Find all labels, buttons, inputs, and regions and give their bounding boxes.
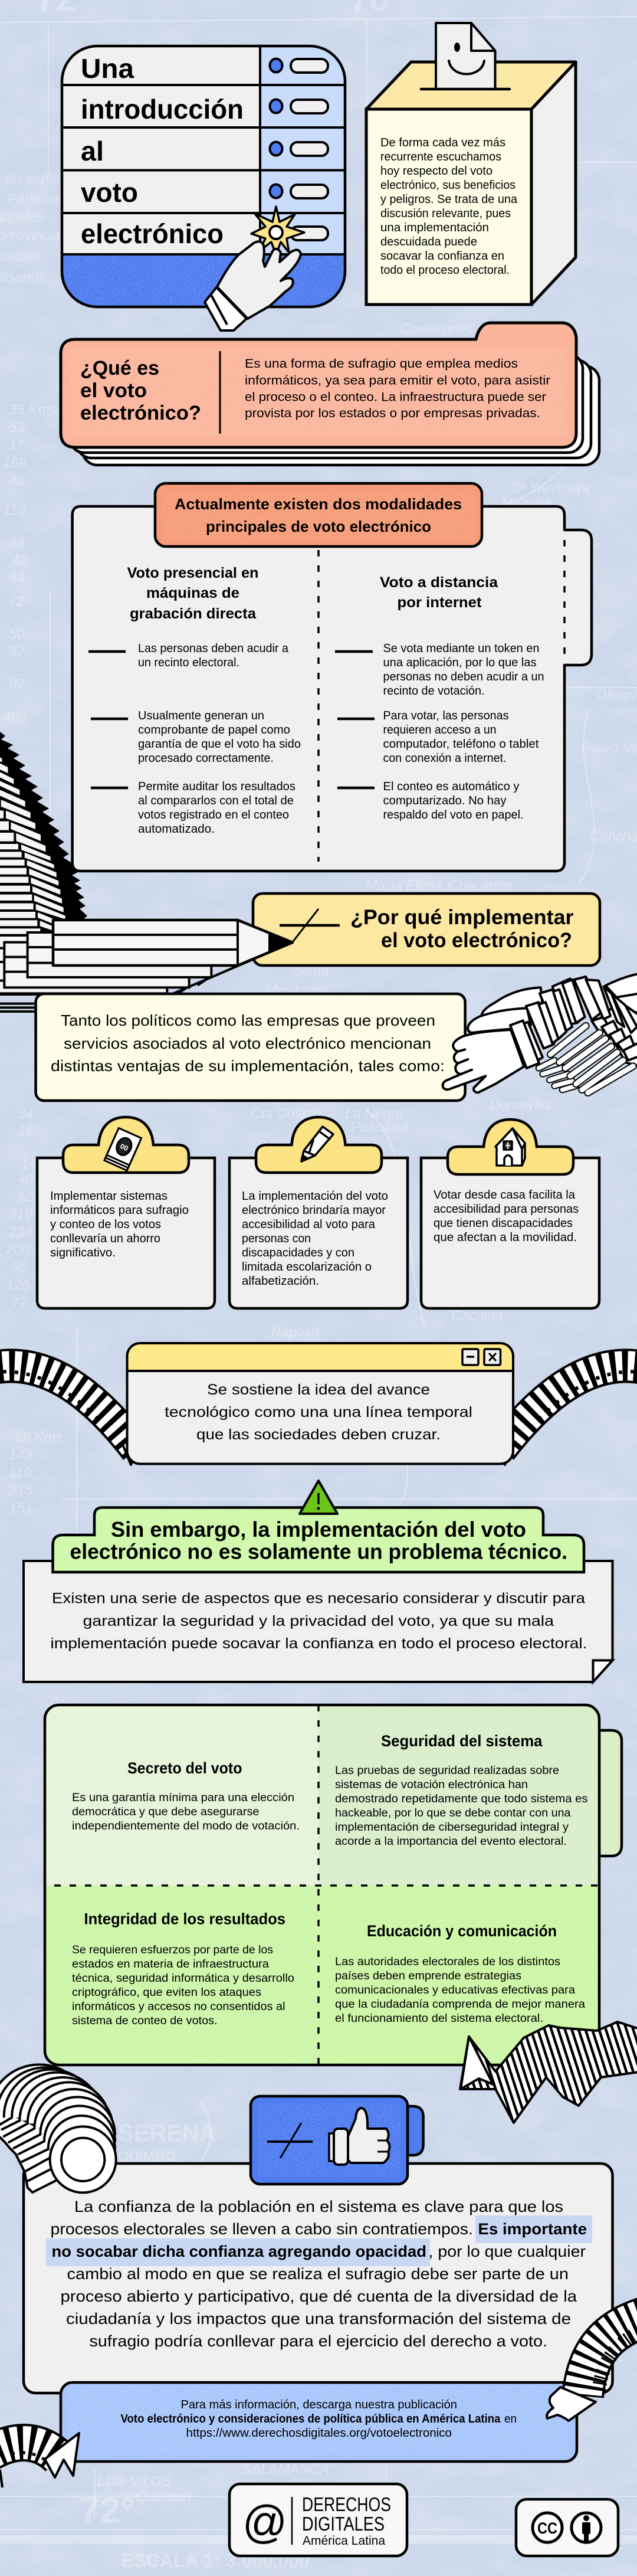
illustration: rope with hand, lower right	[547, 2316, 637, 2421]
background map texture: Cº Yarvicaya	[510, 480, 590, 496]
panel: four aspects	[41, 1700, 622, 2068]
column: voto presencial: comprobante de papel como	[138, 724, 290, 737]
background map texture: 53	[9, 420, 25, 436]
column: voto presencial: garantía de que el voto ha sido	[138, 738, 301, 751]
panel: more information: Voto electrónico y consideraciones de política pública en América Latina	[120, 2413, 501, 2426]
stripes	[0, 757, 65, 934]
heading: electrónico?	[80, 402, 201, 424]
logo: Derechos Digitales	[229, 2484, 407, 2556]
heading: ¿Por qué implementar?: ¿Por qué implementar	[350, 906, 574, 929]
card: accesibilidad: personas con	[242, 1232, 311, 1245]
card: ahorro: significativo.	[50, 1246, 116, 1259]
icon: banknotes	[104, 1128, 142, 1170]
card: accesibilidad: accesibilidad al voto para	[242, 1218, 376, 1231]
card: accesibilidad: discapacidades y con	[242, 1246, 354, 1259]
icon: thumbs up badge	[251, 2096, 423, 2184]
heading: problema técnico: Sin embargo, la implementación del voto	[111, 1517, 526, 1541]
confianza text: no socabar dicha confianza agregando opacidad	[52, 2243, 426, 2260]
background map texture: Camarones	[400, 321, 473, 337]
confianza text: sufragio podría conllevar para el ejercicio del derecho a voto.	[90, 2332, 547, 2350]
icon: house	[495, 1128, 525, 1166]
panel: ¿Qué es el voto electrónico?	[61, 323, 599, 465]
card: accesibilidad	[229, 1117, 408, 1308]
column: voto a distancia: requieren acceso a un	[383, 724, 497, 737]
icon: hand pressing button	[205, 241, 301, 330]
background map texture: Mamiña	[501, 495, 551, 511]
title text: introducción	[81, 94, 244, 125]
confianza text: , por lo que cualquier	[428, 2243, 586, 2260]
background map texture: 84	[9, 570, 25, 586]
confianza text: ciudadanía y los impactos que una transformación del sistema de	[66, 2310, 571, 2328]
background map texture: Bahía	[292, 963, 329, 978]
header: modalities: principales de voto electrónico	[206, 518, 431, 535]
confianza text: Es importante	[478, 2220, 587, 2238]
cell: integridad de los resultados: criptográfico, que eviten los ataques	[72, 1986, 261, 1999]
background map texture: QUIMBO	[118, 2149, 176, 2165]
background map texture: 52	[18, 1189, 34, 1204]
background map texture: 233	[8, 1224, 33, 1240]
column: voto presencial: grabación directa	[130, 605, 257, 622]
column: voto a distancia: una aplicación, por lo que las	[383, 656, 537, 669]
column: voto a distancia: recinto de votación.	[383, 685, 485, 698]
ballot box text: una implementación	[380, 221, 489, 234]
illustration: coil top-left	[0, 2064, 116, 2192]
heading: problema técnico: electrónico no es solamente un problema técnico.	[70, 1539, 567, 1564]
background map texture: 319	[9, 1206, 32, 1222]
text: aspectos: garantizar la seguridad y la privacidad del voto, ya que su mala	[83, 1613, 554, 1629]
panel: two modalities	[73, 483, 592, 871]
background map texture: 77	[12, 1295, 28, 1311]
column: voto a distancia: computarizado. No hay	[383, 794, 506, 807]
heading: ¿Qué es	[80, 357, 159, 379]
card: ahorro: informáticos para sufragio	[50, 1204, 189, 1217]
ballot box text: recurrente escuchamos	[380, 150, 501, 163]
column: voto a distancia: Para votar, las personas	[383, 709, 508, 722]
background map texture: 200	[5, 1242, 30, 1258]
background map texture: 1: 3.000.000	[203, 2550, 310, 2571]
confianza text: proceso abierto y participativo, que dé cuenta de la diversidad de la	[60, 2287, 577, 2305]
column: voto presencial: Voto presencial en	[127, 565, 258, 581]
heading	[80, 357, 201, 424]
background map texture: 113	[3, 502, 26, 518]
column: voto a distancia: con conexión a internet.	[383, 752, 506, 765]
background map texture: Quilimari	[136, 2489, 192, 2505]
icon: banknotes: 00	[119, 1142, 130, 1153]
logo: Derechos Digitales: @	[242, 2496, 287, 2548]
cell: secreto del voto: Es una garantía mínima para una elección	[72, 1792, 294, 1804]
ballot box text: todo el proceso electoral.	[380, 264, 510, 277]
logo: Creative Commons BY: CC	[537, 2519, 557, 2537]
column: voto presencial: Usualmente generan un	[138, 709, 264, 722]
column: voto presencial: Permite auditar los resultados	[138, 780, 295, 793]
column: voto presencial: máquinas de	[146, 585, 239, 601]
background map texture: 34	[18, 1106, 34, 1122]
background map texture: 151	[9, 1500, 32, 1516]
illustration: arrow ribbon under aspects	[460, 2022, 637, 2123]
column: voto presencial: procesado correctamente.	[138, 752, 274, 765]
indicators: lights and switches	[270, 59, 328, 240]
background map texture: 50	[9, 626, 25, 642]
column: voto presencial: Las personas deben acudir a	[138, 642, 289, 655]
ballot box text: De forma cada vez más	[380, 136, 505, 149]
column: voto a distancia: por internet	[398, 594, 482, 611]
icon: spark	[251, 207, 304, 255]
background map texture: 72	[9, 594, 25, 610]
cell: seguridad del sistema: acorde a la importancia del evento electoral.	[335, 1835, 567, 1848]
column: voto presencial: un recinto electoral.	[138, 656, 239, 669]
background map texture: 40	[9, 473, 25, 489]
text: aspectos	[51, 1590, 587, 1652]
background map texture: 35 Kms.	[9, 402, 61, 418]
background map texture: Paposo	[271, 1324, 319, 1340]
definition text	[245, 357, 550, 420]
background map texture: Particula	[7, 191, 62, 207]
cell: secreto del voto: independientemente del modo de votación.	[72, 1820, 300, 1832]
definition text: el proceso o el conteo. La infraestructura puede ser	[245, 391, 546, 404]
card: accesibilidad: alfabetización.	[242, 1275, 319, 1288]
title text: al	[81, 136, 104, 166]
column: voto presencial: votos registrado en el conteo	[138, 809, 289, 821]
background map texture: 72°	[80, 2490, 135, 2531]
panel: ventajas intro: servicios asociados al voto electrónico mencionan	[64, 1035, 431, 1052]
background map texture: Cachina	[451, 1308, 503, 1324]
card: accesibilidad: limitada escolarización o	[242, 1261, 372, 1274]
background map texture: 460	[3, 709, 27, 725]
heading: el voto	[80, 379, 147, 402]
illustration: left arrow ribbon	[0, 1366, 150, 1465]
logo: Creative Commons BY	[516, 2499, 618, 2556]
cell: secreto del voto	[72, 1759, 300, 1832]
ballot box text: discusión relevante, pues	[380, 207, 511, 220]
column: voto a distancia: Voto a distancia	[380, 574, 498, 591]
heading: ¿Por qué implementar?: el voto electrónico?	[381, 929, 572, 952]
cell: educación y comunicación: el funcionamiento del sistema electoral.	[335, 2012, 543, 2025]
ballot box text: descuidada puede	[380, 235, 477, 248]
cell: secreto del voto: democrática y que debe asegurarse	[72, 1806, 260, 1818]
card: voto desde casa: accesibilidad para personas	[434, 1203, 579, 1216]
panel: ventajas intro: Tanto los políticos como las empresas que proveen	[61, 1012, 435, 1029]
definition text: Es una forma de sufragio que emplea medios	[245, 357, 518, 371]
icon: warning triangle	[300, 1481, 337, 1514]
background map texture: en explot	[6, 171, 64, 186]
cell: integridad de los resultados: Integridad de los resultados	[84, 1910, 285, 1927]
cell: educación y comunicación: Educación y comunicación	[367, 1922, 557, 1940]
icon: pencil	[301, 1127, 333, 1161]
definition text: informáticos, ya sea para emitir el voto, para asistir	[245, 374, 550, 387]
cell: seguridad del sistema: implementación de ciberseguridad integral y	[335, 1821, 569, 1834]
column: voto a distancia: computador, teléfono o tablet	[383, 738, 539, 751]
illustration: large pencil	[53, 920, 293, 965]
column: voto presencial	[88, 565, 301, 836]
card: ahorro: Implementar sistemas	[50, 1190, 168, 1203]
background map texture: 39	[9, 535, 25, 551]
cell: integridad de los resultados: técnica, seguridad informática y desarrollo	[72, 1972, 294, 1985]
background map texture: Chacance	[448, 878, 512, 893]
logo: Derechos Digitales: América Latina	[303, 2534, 385, 2548]
background map texture: 67	[9, 676, 25, 692]
column: voto a distancia	[335, 574, 544, 821]
cell: integridad de los resultados: informáticos y accesos no consentidos al	[72, 2001, 285, 2013]
cell: secreto del voto: Secreto del voto	[127, 1759, 242, 1777]
cell: integridad de los resultados: sistema de conteo de votos.	[72, 2015, 217, 2027]
panel: more information: Para más información, descarga nuestra publicación	[180, 2398, 457, 2411]
background map texture: 40	[18, 1171, 34, 1187]
background map texture: Domeyko	[490, 1097, 549, 1113]
background map texture: cipales	[0, 209, 44, 225]
cell: educación y comunicación: países deben emprende estrategias	[335, 1970, 521, 1982]
background map texture: ueblos	[0, 248, 42, 264]
text: aspectos: Existen una serie de aspectos que es necesario considerar y discutir para	[52, 1590, 585, 1606]
title text: electrónico	[81, 218, 224, 249]
panel: window dialog: Se sostiene la idea del avance	[207, 1382, 430, 1398]
illustration: right arrow ribbon	[484, 1366, 637, 1465]
illustration: arrow ribbon lower left	[0, 2433, 79, 2487]
background map texture: 110	[9, 1465, 32, 1481]
column: voto presencial: al compararlos con el total de	[138, 794, 294, 807]
cell: educación y comunicación: comunicacionales y educativas efectivas para	[335, 1984, 575, 1996]
background map texture: 14	[21, 1156, 37, 1172]
background map texture: 169	[3, 455, 27, 471]
highlight	[46, 2215, 592, 2266]
panel: ballot box	[366, 23, 576, 305]
cell: seguridad del sistema: demostrado repetidamente que todo sistema es	[335, 1793, 587, 1805]
text: aspectos: implementación puede socavar la confianza en todo el proceso electoral.	[51, 1635, 587, 1652]
column: voto a distancia: Se vota mediante un token en	[383, 642, 539, 655]
panel: more information	[61, 2382, 577, 2462]
background map texture: Provincia	[2, 228, 61, 244]
cell: educación y comunicación: Las autoridades electorales de los distintos	[335, 1956, 560, 1968]
cell: educación y comunicación: que la ciudadanía comprenda de mejor manera	[335, 1998, 585, 2011]
background map texture: ESCALA	[121, 2550, 199, 2571]
background map texture: María Elena	[366, 878, 442, 893]
card: voto desde casa: que afectan a la movilidad.	[434, 1231, 577, 1244]
ballot box text: hoy respecto del voto	[380, 165, 492, 178]
background map texture: 42	[12, 552, 28, 568]
card: voto desde casa: que tienen discapacidades	[434, 1217, 573, 1230]
title text: voto	[81, 177, 138, 208]
background map texture: Cta Colaso	[251, 1106, 321, 1122]
header: modalities: Actualmente existen dos modalidades	[175, 495, 462, 513]
cell: integridad de los resultados: Se requieren esfuerzos por parte de los	[72, 1944, 273, 1956]
panel: window dialog: que las sociedades deben cruzar.	[196, 1426, 441, 1443]
logo: Derechos Digitales: DERECHOS	[302, 2493, 391, 2515]
window buttons	[462, 1349, 500, 1365]
background map texture: 17	[9, 437, 25, 453]
background map texture: SALAMANCA	[242, 2462, 329, 2477]
icon: smiling ballot	[421, 23, 510, 89]
panel: title	[59, 41, 349, 330]
stacked pencils	[0, 932, 211, 1012]
illustration: pile of pencils	[0, 732, 293, 1012]
logo: Derechos Digitales: DIGITALES	[302, 2513, 385, 2535]
panel: ventajas intro	[36, 994, 465, 1101]
ballot box text: y peligros. Se trata de una	[380, 193, 518, 206]
heading: problema técnico	[53, 1507, 584, 1572]
cell: integridad de los resultados: estados en materia de infraestructura	[72, 1958, 269, 1971]
column: voto a distancia: El conteo es automático y	[383, 780, 519, 793]
background map texture: 215	[8, 1482, 33, 1498]
panel: confianza	[24, 2163, 612, 2393]
cell: seguridad del sistema: Seguridad del sistema	[381, 1732, 543, 1750]
icon: not-equal mark	[280, 909, 340, 941]
panel: more information: https://www.derechosdigitales.org/votoelectronico	[186, 2427, 452, 2440]
card: voto desde casa	[421, 1120, 599, 1308]
background map texture: 16	[18, 1124, 34, 1140]
background map texture: 66 Kms	[15, 1429, 63, 1445]
panel: window dialog: tecnológico como una una línea temporal	[165, 1404, 472, 1420]
definition text: provista por los estados o por empresas privadas.	[245, 407, 540, 420]
heading: ¿Por qué implementar?	[253, 893, 600, 965]
background map texture: Mejillones	[265, 982, 329, 998]
card: accesibilidad: La implementación del voto	[242, 1190, 388, 1203]
background map texture: 143	[9, 1447, 33, 1463]
confianza text: cambio al modo en que se realiza el sufragio debe ser parte de un	[67, 2265, 569, 2283]
panel: sin embargo	[24, 1481, 612, 1682]
panel: ventajas intro: distintas ventajas de su implementación, tales como:	[51, 1057, 445, 1075]
card: ahorro: conllevaría un ahorro	[50, 1232, 160, 1245]
cell: integridad de los resultados	[72, 1910, 294, 2027]
card: ahorro: y conteo de los votos	[50, 1218, 161, 1231]
card: ahorro	[37, 1117, 215, 1308]
cell: seguridad del sistema: Las pruebas de seguridad realizadas sobre	[335, 1765, 559, 1777]
background map texture: LOS VILOS	[97, 2473, 171, 2489]
card: voto desde casa: Votar desde casa facilita la	[434, 1189, 576, 1202]
cell: educación y comunicación	[335, 1922, 585, 2025]
background map texture: 96	[12, 1259, 28, 1275]
panel: window dialog	[127, 1343, 513, 1464]
title text	[81, 53, 244, 249]
confianza text: procesos electorales se lleven a cabo sin contratiempos.	[51, 2220, 473, 2238]
background map texture: La Negra	[345, 1106, 403, 1122]
cell: seguridad del sistema: hackeable, por lo que se debe contar con una	[335, 1807, 571, 1819]
background map texture: 126	[6, 1277, 30, 1293]
column: voto a distancia: personas no deben acudir a un	[383, 670, 544, 683]
background map texture: Palestina	[351, 1119, 409, 1135]
illustration: pointing hands with sleeves	[443, 974, 637, 1093]
background map texture: SERENA	[118, 2120, 216, 2146]
cell: seguridad del sistema: sistemas de votación electrónica han	[335, 1779, 528, 1791]
cell: seguridad del sistema	[335, 1732, 587, 1848]
header: modalities	[155, 483, 482, 546]
panel: more information: en	[504, 2413, 517, 2426]
background map texture: 37	[9, 644, 25, 660]
column: voto presencial: automatizado.	[138, 823, 215, 836]
title text: Una	[81, 53, 134, 84]
confianza text	[51, 2198, 587, 2350]
ballot box text: electrónico, sus beneficios	[380, 179, 515, 192]
ballot box text: socavar la confianza en	[380, 250, 504, 263]
column: voto a distancia: respaldo del voto en papel.	[383, 809, 524, 821]
card: accesibilidad: electrónico brindaría mayor	[242, 1204, 386, 1217]
confianza text: La confianza de la población en el sistema es clave para que los	[74, 2198, 563, 2215]
ballot box text	[380, 136, 518, 277]
background map texture: aserios	[0, 269, 45, 285]
